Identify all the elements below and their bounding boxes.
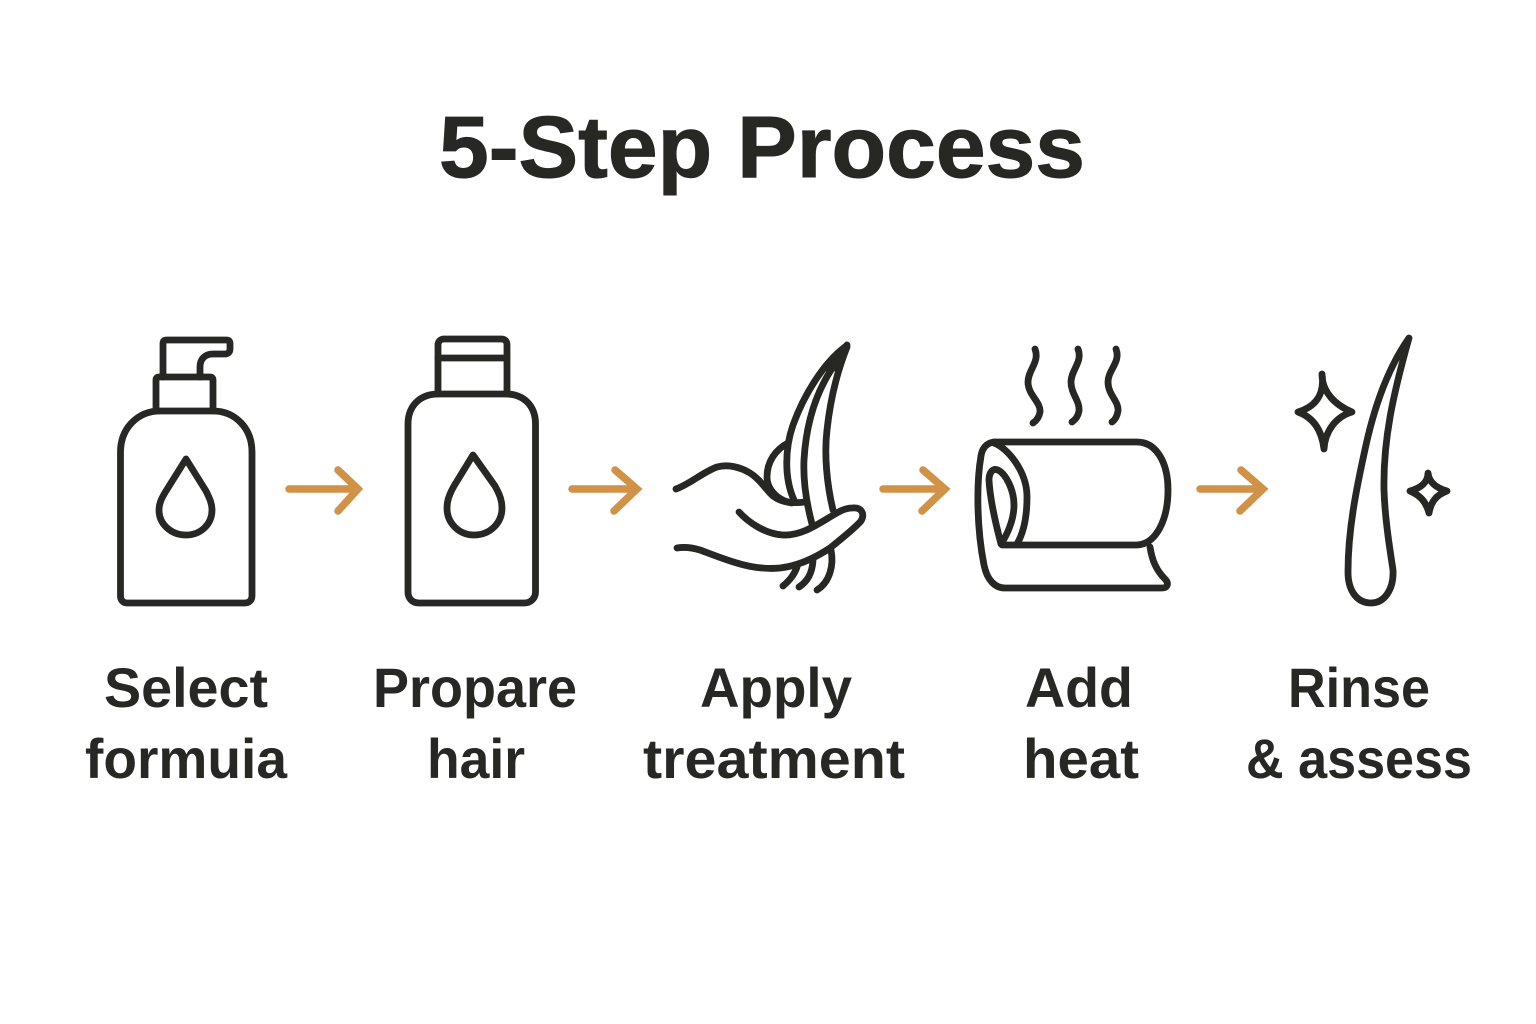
- label: step 3: Apply: [700, 656, 852, 719]
- label: step 1: Select: [104, 656, 268, 719]
- icon: shiny hair strand with sparkles: [1298, 338, 1447, 603]
- label: step 1: formuia: [85, 727, 288, 790]
- label: step 1: [85, 656, 288, 790]
- icon: bottle: [408, 339, 536, 603]
- label: step 4: Add: [1025, 656, 1133, 719]
- title: 5-Step Process: [439, 99, 1085, 196]
- arrow 2: [572, 470, 637, 511]
- arrow 3: [883, 470, 945, 511]
- label: step 2: hair: [427, 727, 525, 790]
- label: step 3: [643, 656, 905, 790]
- icon: warm towel with steam: [978, 349, 1168, 588]
- label: step 2: [373, 656, 577, 790]
- arrow 1: [289, 470, 358, 511]
- label: step 5: [1246, 656, 1472, 790]
- arrow 4: [1200, 470, 1263, 511]
- label: step 5: & assess: [1246, 727, 1472, 790]
- label: step 2: Propare: [373, 656, 577, 719]
- icon: pump bottle: [120, 340, 252, 603]
- label: step 3: treatment: [643, 727, 905, 790]
- label: step 5: Rinse: [1288, 656, 1430, 719]
- label: step 4: heat: [1023, 727, 1139, 790]
- icon: hand applying treatment to hair: [676, 345, 863, 590]
- label: step 4: [1023, 656, 1139, 790]
